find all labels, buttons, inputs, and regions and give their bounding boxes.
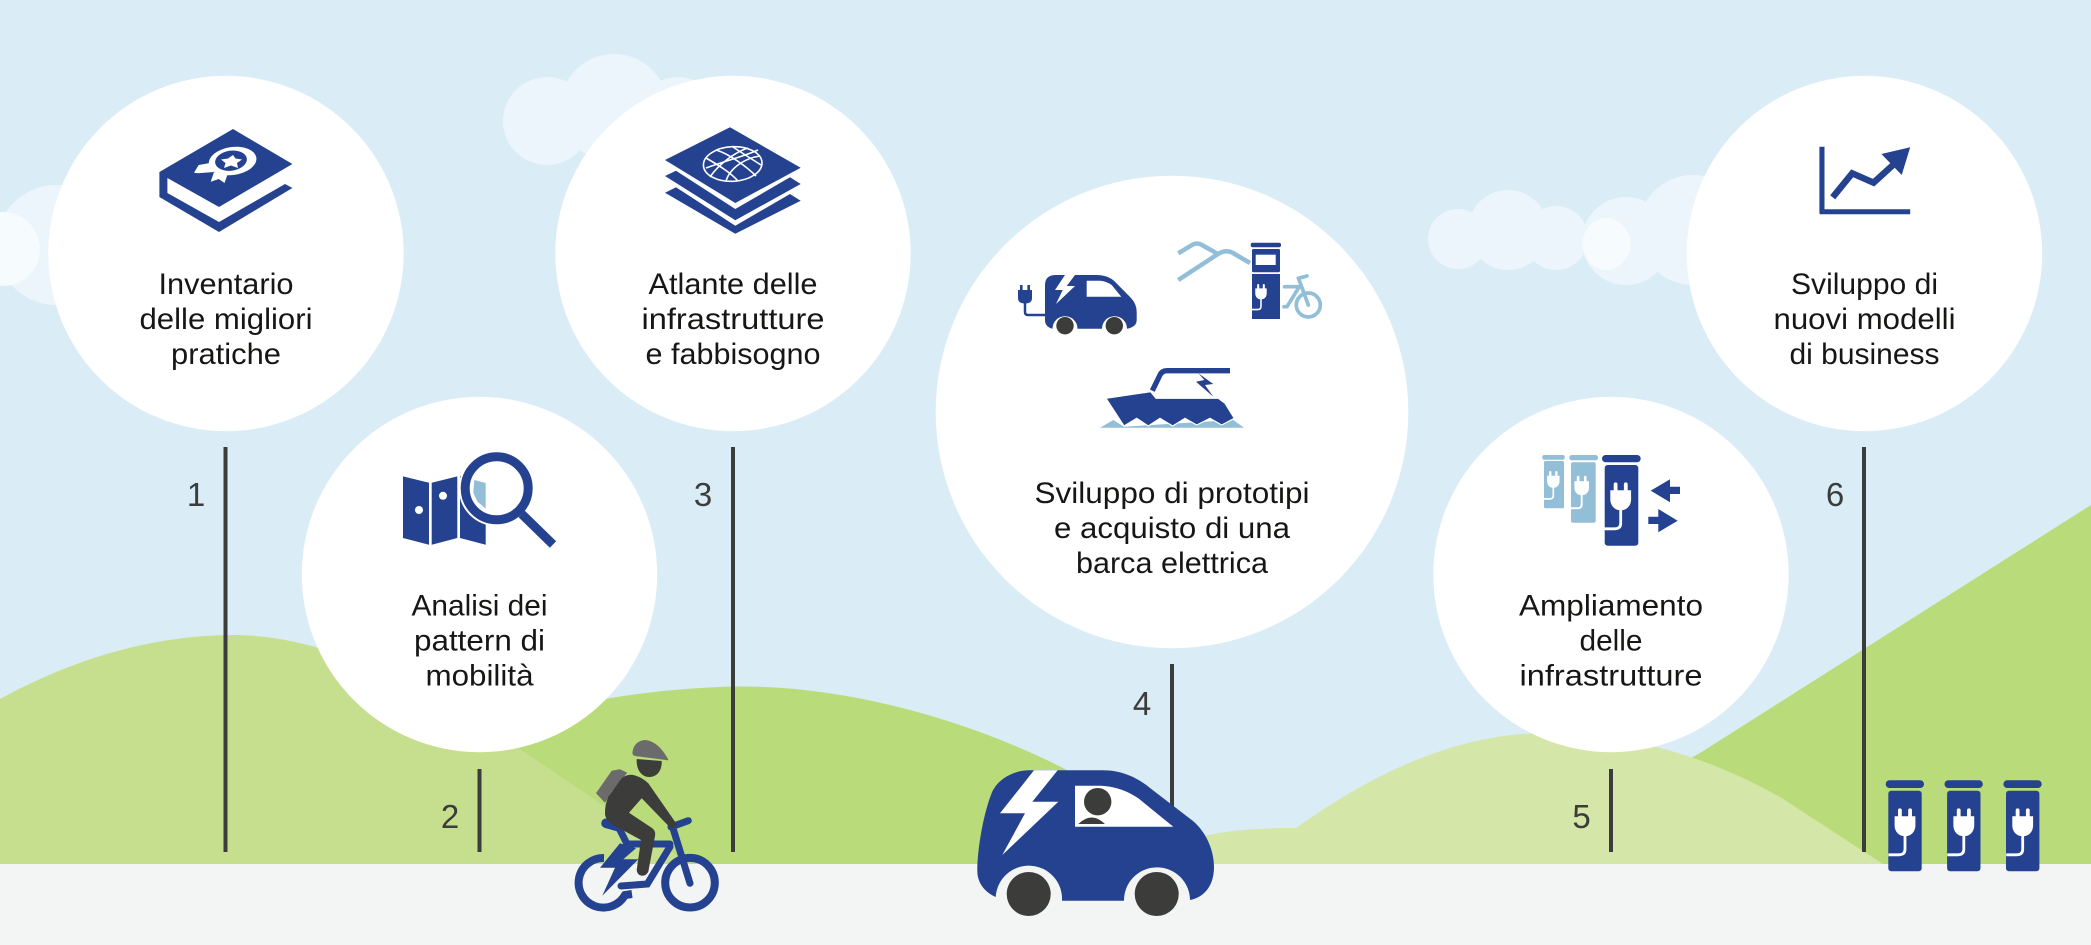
text: step 1 label: Inventario — [158, 268, 294, 301]
text: step 6 label: nuovi modelli — [1774, 303, 1956, 336]
text: step 2 label: Analisi dei — [412, 590, 548, 622]
charger 1 — [1886, 780, 1924, 871]
icon: book with medal — [159, 129, 292, 232]
text: step 2 label — [412, 590, 548, 692]
cloud: right — [1428, 175, 1748, 285]
text: step 4 label: e acquisto di una — [1054, 512, 1290, 545]
panel: step 5 infrastructure expansion — [1433, 397, 1789, 752]
panel: step 1 inventory — [48, 76, 404, 431]
charging stations on road — [1886, 780, 2042, 871]
icon: rising line chart — [1819, 147, 1910, 214]
timeline line and number 1 — [187, 447, 228, 852]
text: step 2 label: pattern di — [414, 624, 545, 658]
timeline line and number 1: 1 — [187, 476, 205, 513]
timeline line and number 3 — [694, 447, 735, 852]
cloud: centre left — [503, 54, 718, 165]
timeline line and number 6: 6 — [1826, 476, 1844, 513]
text: step 3 label — [642, 268, 824, 371]
electric car with passenger — [977, 770, 1214, 916]
icon: bike charging station with mountains — [1178, 243, 1320, 319]
text: step 6 label: di business — [1790, 338, 1940, 371]
text: step 4 label — [1034, 477, 1310, 580]
panel: step 2 mobility analysis — [302, 397, 657, 752]
charger 2 — [1944, 780, 1983, 871]
road — [0, 864, 2091, 945]
text: step 2 label: mobilità — [426, 660, 534, 692]
text: step 5 label: Ampliamento — [1519, 590, 1703, 622]
charger 3 — [2003, 780, 2042, 871]
timeline line and number 4 — [1133, 664, 1174, 814]
text: step 4 label: barca elettrica — [1076, 547, 1268, 580]
icon: electric car with plug — [1018, 275, 1137, 334]
hill: left — [0, 635, 690, 864]
icon: growing charging stations — [1542, 455, 1680, 546]
rider — [596, 740, 677, 876]
cyclist on electric bike — [579, 740, 715, 908]
timeline line and number 5 — [1572, 769, 1613, 852]
timeline line and number 5: 5 — [1572, 798, 1591, 835]
hill: centre — [470, 687, 1250, 864]
timeline line and number 2: 2 — [441, 798, 459, 835]
panel: step 6 business models — [1687, 76, 2042, 431]
bike — [579, 821, 715, 908]
timeline line and number 6 — [1826, 447, 1866, 852]
panel: step 3 atlas — [555, 76, 911, 431]
text: step 1 label — [140, 268, 312, 371]
panel: step 4 prototypes — [936, 176, 1408, 648]
text: step 3 label: infrastrutture — [642, 303, 824, 336]
text: step 1 label: pratiche — [171, 338, 281, 371]
text: step 3 label: Atlante delle — [648, 268, 818, 301]
icon: map with magnifier — [403, 450, 553, 545]
text: step 5 label: infrastrutture — [1520, 660, 1702, 692]
icon: electric boat — [1100, 371, 1244, 428]
hill: right large — [1500, 505, 2091, 864]
text: step 4 label: Sviluppo di prototipi — [1034, 477, 1310, 510]
text: step 6 label — [1774, 268, 1956, 371]
text: step 6 label: Sviluppo di — [1791, 268, 1938, 301]
icon: map layers with globe — [665, 127, 801, 234]
cloud: left — [0, 185, 116, 305]
text: step 5 label — [1519, 590, 1703, 692]
text: step 5 label: delle — [1580, 624, 1642, 658]
text: step 3 label: e fabbisogno — [646, 338, 820, 371]
text: step 1 label: delle migliori — [140, 303, 312, 336]
timeline line and number 3: 3 — [694, 476, 712, 513]
hill: right pale — [1190, 733, 1883, 864]
timeline line and number 4: 4 — [1133, 685, 1151, 722]
timeline line and number 2 — [441, 769, 482, 852]
